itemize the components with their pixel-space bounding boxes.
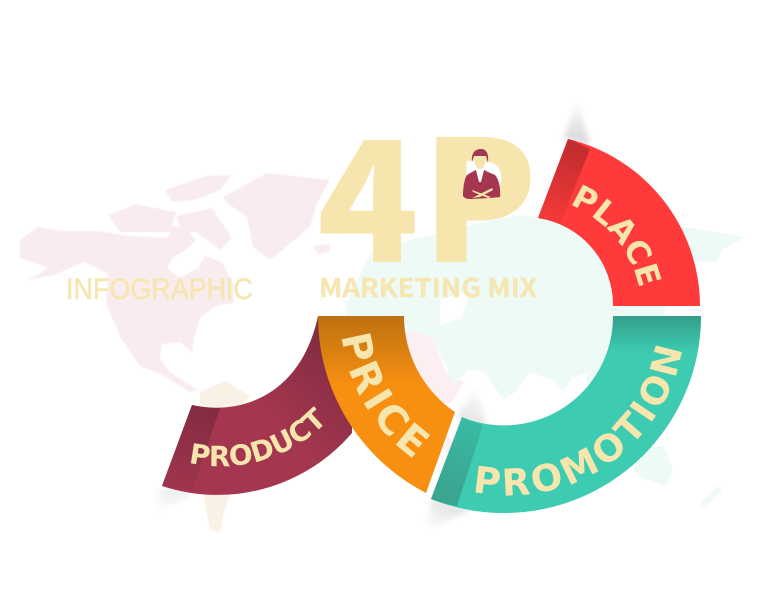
label: place: PLACE <box>572 184 662 286</box>
promotion shaded end <box>431 417 483 506</box>
label: price: PRICE <box>342 333 430 458</box>
ribbon shadows <box>155 100 590 532</box>
map: south america <box>200 381 250 532</box>
heading: 4P <box>317 68 537 311</box>
segment: promotion <box>431 316 701 513</box>
segment: price <box>318 316 455 493</box>
segment: place <box>538 139 700 306</box>
place shaded end <box>538 139 590 224</box>
segment: product <box>162 316 352 495</box>
map: white gaps <box>378 290 590 396</box>
map: eurasia <box>345 215 745 508</box>
label: promotion: PROMOTION <box>476 346 682 496</box>
subtitle: infographic: INFOGRAPHIC <box>66 273 253 306</box>
map: north america <box>20 173 330 392</box>
icon: businessman with crossed arms <box>463 149 500 199</box>
subtitle: marketing mix: MARKETING MIX <box>319 268 537 305</box>
heading: 4P: P <box>422 68 537 311</box>
world map background <box>20 173 745 532</box>
map: africa <box>405 330 464 456</box>
product shaded end <box>162 405 220 489</box>
label: product: PRODUCT <box>190 406 323 466</box>
heading: 4P: 4 <box>317 68 419 311</box>
